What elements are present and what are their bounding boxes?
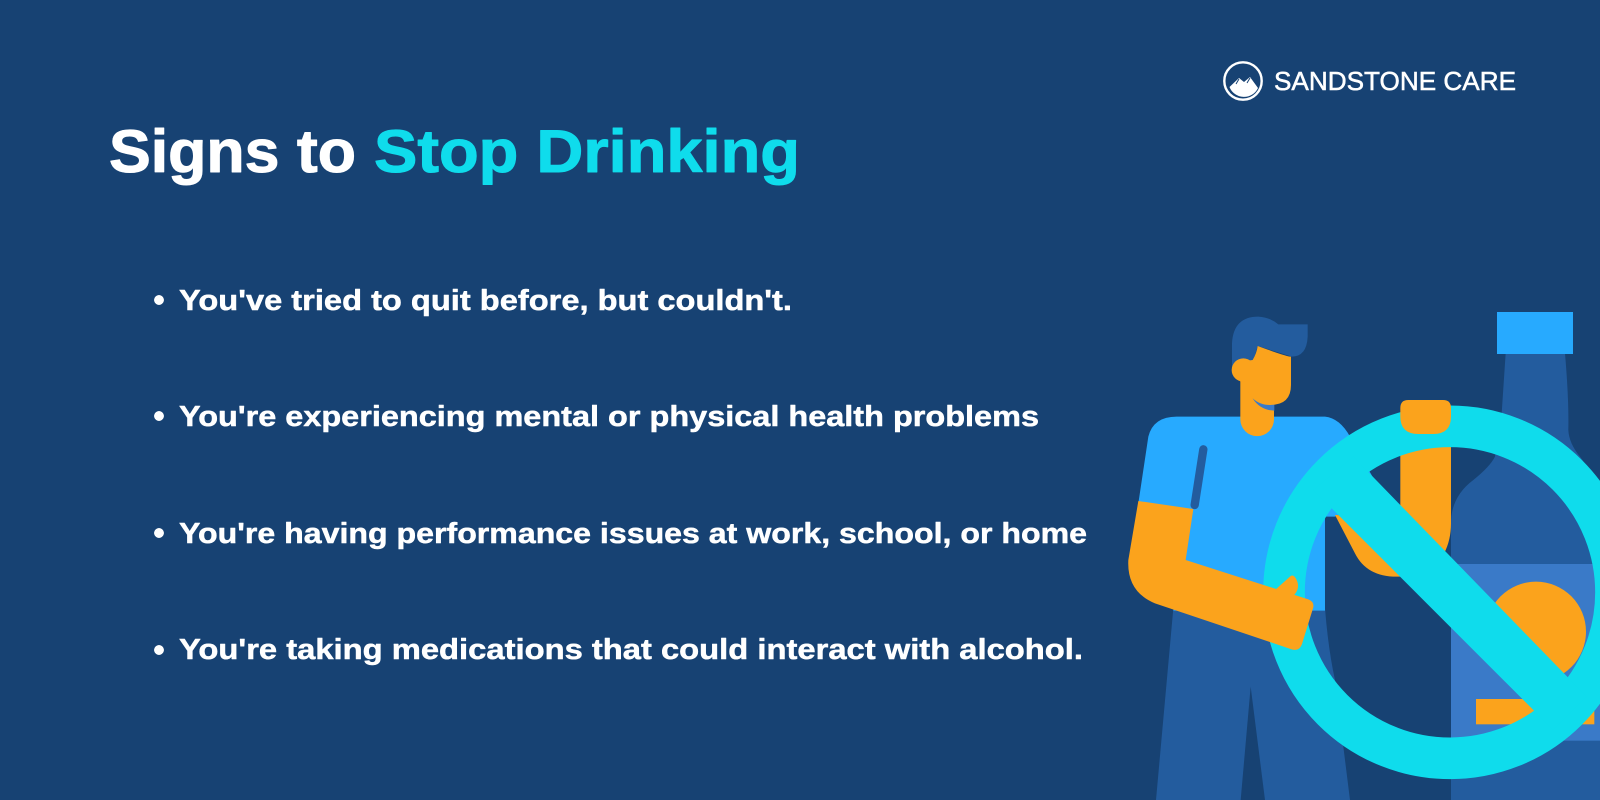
man: sleeve crease xyxy=(1195,449,1203,505)
bullet 4: You're taking medications that could interact with alcohol. xyxy=(179,634,1083,666)
bullet 2: You're experiencing mental or physical health problems xyxy=(179,401,1039,433)
illustration: man, bottle and prohibition sign xyxy=(1128,312,1600,800)
title: Stop Drinking xyxy=(374,118,800,185)
man: shirt xyxy=(1138,417,1380,611)
bullet 3: You're having performance issues at work, school, or home xyxy=(179,518,1087,550)
man: head xyxy=(1232,317,1308,436)
man: hand gripping sign xyxy=(1400,400,1451,434)
logo: Sandstone Care: SANDSTONE CARE xyxy=(1274,66,1516,96)
prohibition sign xyxy=(1284,426,1600,758)
man: raised arm xyxy=(1335,423,1451,577)
bullet list xyxy=(154,285,1087,666)
bullet 1: You've tried to quit before, but couldn't. xyxy=(179,285,792,317)
man: front arm xyxy=(1128,501,1313,650)
logo: Sandstone Care xyxy=(1224,62,1516,100)
title: Signs to xyxy=(109,118,356,185)
bottle xyxy=(1451,312,1600,800)
title xyxy=(109,118,800,185)
man: trousers xyxy=(1156,608,1350,800)
